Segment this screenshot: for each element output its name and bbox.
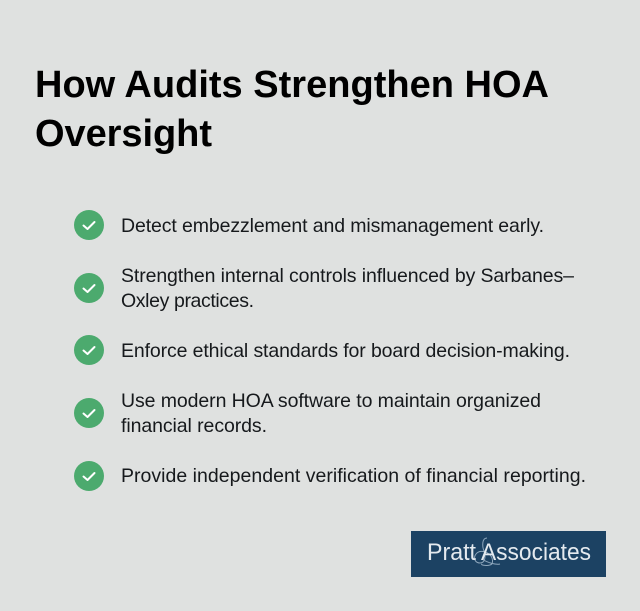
icon: check badge — [74, 398, 104, 428]
list item: detect embezzlement — [74, 210, 544, 240]
item text: financial records. — [121, 415, 267, 437]
item text: Enforce ethical standards for board decision-making. — [121, 340, 570, 362]
logo wordmark: Associates — [481, 539, 591, 566]
title — [35, 64, 549, 155]
item text: Oxley practices. — [121, 290, 254, 312]
icon: check badge — [74, 273, 104, 303]
logo ampersand flourish — [475, 538, 500, 565]
item text: Strengthen internal controls influenced by Sarbanes– — [121, 265, 574, 287]
icon: check badge — [74, 210, 104, 240]
item text — [121, 390, 541, 437]
icon: check badge — [74, 335, 104, 365]
icon: check badge — [74, 461, 104, 491]
list item: ethical standards — [74, 335, 570, 365]
item text: Use modern HOA software to maintain organized — [121, 390, 541, 412]
logo wordmark: Pratt — [427, 539, 476, 566]
list item: HOA software — [74, 390, 541, 437]
item text — [121, 265, 574, 312]
list item: internal controls — [74, 265, 574, 312]
logo: Pratt & Associates — [411, 531, 606, 577]
logo wordmark — [427, 539, 591, 566]
list item: independent verification — [74, 461, 586, 491]
item text: Provide independent verification of financial reporting. — [121, 465, 586, 487]
title: How Audits Strengthen HOA — [35, 64, 549, 106]
title: Oversight — [35, 113, 212, 155]
item text: Detect embezzlement and mismanagement early. — [121, 215, 544, 237]
